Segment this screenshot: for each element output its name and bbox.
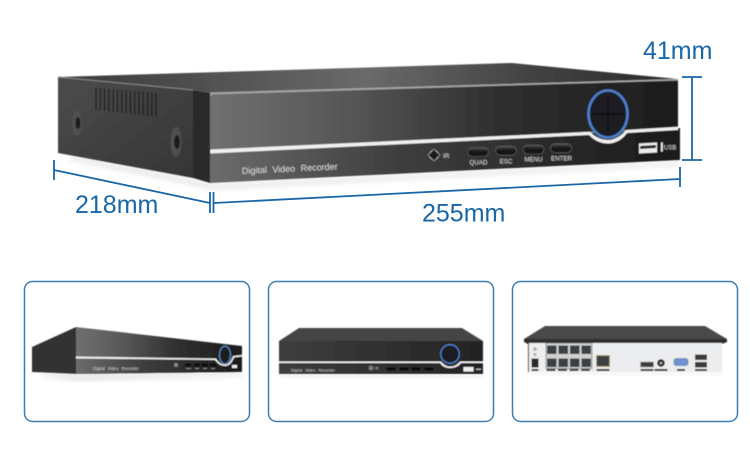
buttons	[185, 364, 216, 366]
reflection	[40, 373, 242, 381]
IR: IR	[375, 366, 379, 370]
audio jack	[657, 359, 665, 367]
dimension: depth 218mm: 218mm	[75, 191, 158, 219]
IR	[368, 365, 379, 371]
reflection	[281, 375, 481, 378]
text: Digital Video Recorder	[291, 368, 336, 372]
QUAD button: QUAD	[470, 160, 488, 166]
MENU button: MENU	[524, 156, 543, 164]
lower band	[76, 358, 242, 374]
front top highlight	[210, 79, 678, 97]
silver strip	[211, 127, 678, 154]
dimension: height 41mm: 41mm	[643, 37, 712, 65]
port labels	[532, 369, 707, 371]
ring	[441, 345, 459, 363]
network port	[596, 356, 610, 366]
IR sensor icon: IR	[443, 153, 450, 160]
ESC button: ESC	[500, 158, 513, 166]
dimension: width 255mm	[214, 167, 680, 228]
ENTER button	[550, 144, 573, 162]
USB port	[639, 142, 676, 154]
front	[279, 341, 483, 374]
VGA port	[674, 358, 688, 366]
front upper panel	[210, 80, 678, 150]
control ring button	[588, 90, 628, 138]
rear device	[524, 326, 727, 375]
usb	[464, 367, 481, 372]
side ventilation slots	[96, 88, 156, 117]
reflection	[526, 373, 724, 375]
top and front	[76, 327, 242, 374]
product name text: Digital Video Recorder	[242, 161, 338, 176]
MENU button	[523, 145, 544, 164]
PoE ports	[547, 346, 591, 367]
ESC button	[496, 146, 516, 166]
device shadow	[70, 156, 680, 189]
dimension: height 41mm	[643, 37, 712, 160]
strip	[279, 362, 483, 368]
angled device	[32, 327, 242, 381]
top surface	[58, 63, 678, 93]
main recorder device	[58, 63, 680, 189]
rear plate	[529, 343, 722, 372]
side	[32, 327, 76, 374]
usb	[232, 365, 237, 368]
panel: angled front view	[24, 282, 250, 422]
QUAD button	[468, 148, 488, 166]
power jack	[532, 358, 538, 368]
dimension: depth 218mm	[54, 160, 210, 219]
USB port: USB	[664, 146, 676, 152]
HDMI port	[640, 362, 654, 367]
text: Digital Video Recorder	[93, 366, 139, 371]
side screw left	[72, 110, 82, 136]
panel: rear view	[512, 282, 738, 422]
power symbols	[533, 347, 537, 356]
buttons	[386, 368, 434, 370]
panel: straight front view	[268, 282, 494, 422]
body frame	[524, 339, 727, 372]
front device	[279, 328, 483, 378]
dimension: width 255mm: 255mm	[422, 200, 505, 228]
front lower panel	[210, 128, 680, 183]
ENTER button: ENTER	[551, 156, 573, 162]
IR sensor icon	[428, 149, 450, 161]
strip	[76, 355, 242, 366]
side screw right	[170, 127, 182, 157]
top	[524, 326, 727, 339]
front corner strip	[193, 90, 210, 183]
port block	[546, 343, 592, 368]
left side panel	[58, 77, 193, 178]
USB ports	[695, 354, 707, 368]
top	[279, 328, 483, 341]
IR	[174, 363, 178, 367]
ring	[220, 346, 230, 364]
